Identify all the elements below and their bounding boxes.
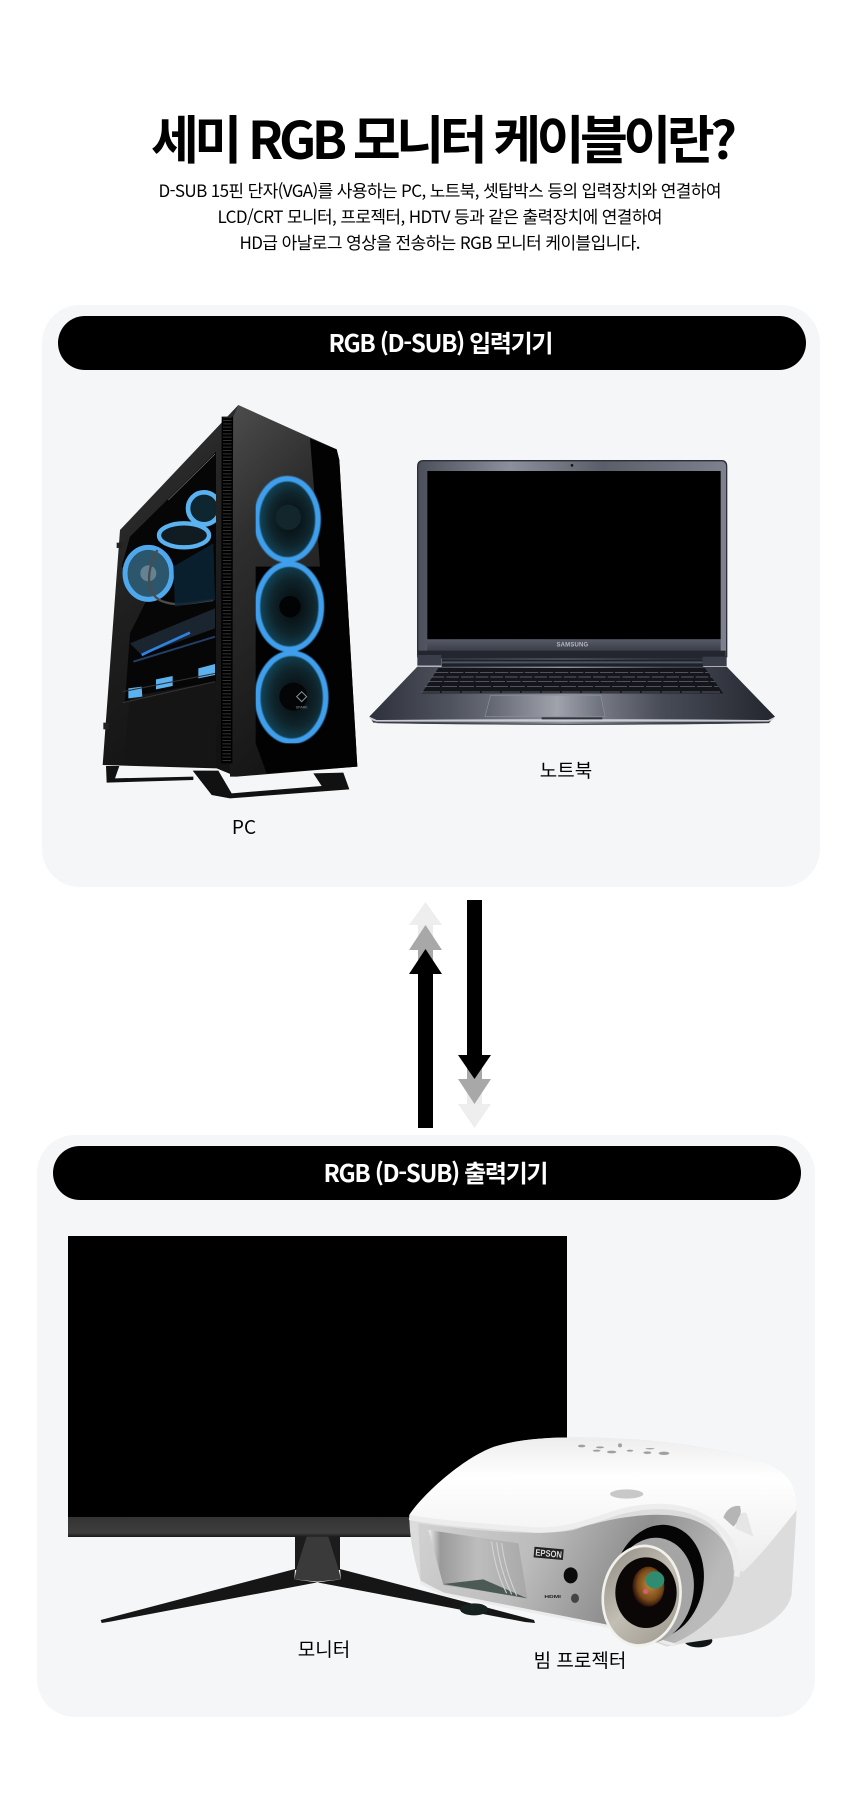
heading pill: output devices: RGB (D-SUB) 출력기기 (324, 1154, 548, 1189)
label: beam projector: 빔 프로젝터 (534, 1646, 626, 1673)
icon: monitor (68, 1236, 567, 1623)
arrow: downward fade (458, 900, 491, 1128)
silver front band (418, 1515, 734, 1643)
title: 세미 RGB 모니터 케이블이란? (151, 99, 737, 174)
vent recess (428, 1530, 527, 1598)
icon: PC tower (103, 405, 357, 798)
EPSON badge: EPSON (535, 1548, 563, 1560)
graphics card (130, 608, 215, 655)
lens (602, 1516, 714, 1647)
side fans (123, 492, 220, 703)
top controls (578, 1443, 669, 1455)
subtitle text block: LCD/CRT 모니터, 프로젝터, HDTV 등과 같은 출력장치에 연결하여 (218, 203, 662, 228)
touchpad (485, 695, 605, 717)
subtitle text block (158, 177, 722, 254)
arrow: upward fade (409, 902, 442, 1128)
icon: beam projector (409, 1437, 797, 1651)
icon: beam projector: HDMI (544, 1594, 561, 1599)
icon: PC tower: SPARK (296, 705, 308, 709)
subtitle text block: HD급 아날로그 영상을 전송하는 RGB 모니터 케이블입니다. (240, 229, 640, 254)
heading pill: input devices: RGB (D-SUB) 입력기기 (328, 324, 554, 359)
icon: laptop: SAMSUNG (556, 642, 589, 648)
label: monitor: 모니터 (298, 1635, 350, 1662)
icon: laptop (369, 461, 775, 725)
heading pill: output devices (53, 1146, 801, 1200)
panel: input devices (42, 305, 820, 887)
label: laptop: 노트북 (540, 756, 592, 783)
subtitle text block: D-SUB 15핀 단자(VGA)를 사용하는 PC, 노트북, 셋탑박스 등의 입력장치와 연결하여 (158, 177, 722, 202)
heading pill: input devices (58, 316, 806, 370)
keyboard (422, 668, 723, 693)
panel: output devices (37, 1135, 815, 1717)
front fans (257, 479, 326, 741)
feet (106, 766, 193, 783)
label: PC: PC (232, 813, 256, 840)
vent strip (210, 417, 244, 763)
